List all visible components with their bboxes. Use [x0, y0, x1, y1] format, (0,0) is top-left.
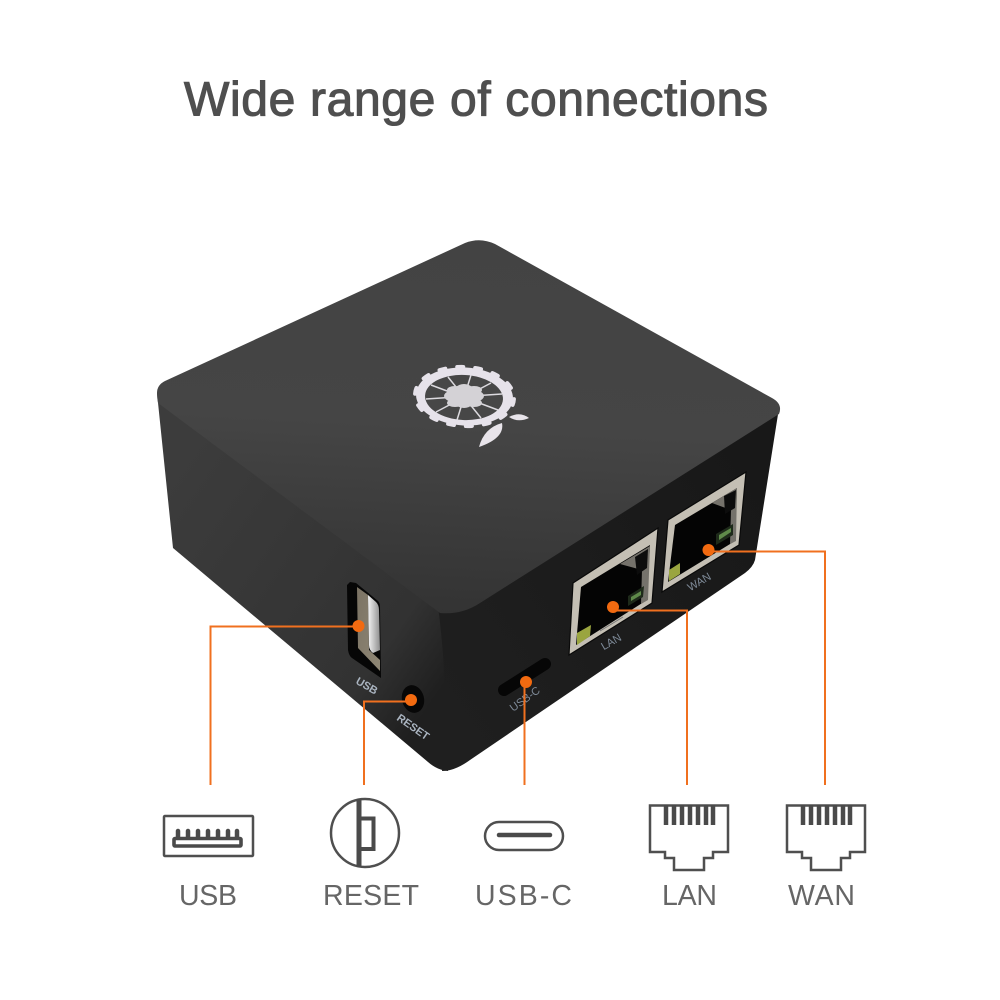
callout line: USB [210, 620, 364, 785]
label: USB: USB [179, 880, 237, 912]
icon: USB [164, 816, 253, 856]
logo [414, 364, 529, 447]
device: mini router [157, 240, 780, 771]
WAN contacts [712, 488, 737, 544]
WAN port [662, 472, 746, 594]
device top face [157, 240, 780, 613]
USB slot [347, 582, 381, 678]
logo flower [444, 384, 484, 408]
LAN print: LAN [599, 632, 624, 653]
LAN port [569, 528, 658, 655]
logo gear ring [415, 365, 514, 428]
WAN frame [662, 472, 746, 592]
WAN print: WAN [686, 571, 713, 594]
label: USB-C: USB-C [475, 880, 572, 912]
USB-C slot [504, 664, 545, 690]
callout line: LAN [607, 601, 687, 785]
reset hole [399, 683, 427, 715]
label: WAN: WAN [788, 880, 855, 912]
LAN contacts [620, 546, 650, 604]
label: RESET: RESET [323, 880, 419, 912]
WAN leds [716, 524, 733, 545]
reset button [394, 683, 431, 743]
LAN lower strip [600, 617, 623, 631]
USB-C print: USB-C [508, 685, 543, 714]
reset print: RESET [394, 712, 431, 743]
device right face [438, 408, 779, 771]
USB metal shell [357, 587, 380, 671]
WAN cavity [668, 488, 737, 582]
icon: LAN [650, 805, 728, 870]
LAN leds [628, 586, 644, 606]
LAN cavity [576, 545, 650, 645]
device left face [157, 393, 448, 771]
icon: USB-C [485, 822, 563, 850]
callout line: WAN [702, 544, 825, 785]
USB port [347, 582, 381, 697]
icon: WAN [787, 805, 865, 870]
callout line: USB-C [520, 676, 532, 785]
label: LAN: LAN [662, 880, 717, 912]
USB-C port [504, 664, 545, 714]
logo spokes [426, 375, 502, 420]
USB print: USB [353, 675, 380, 697]
USB white tongue [368, 595, 380, 653]
logo leaves [509, 414, 529, 420]
callout line: RESET [364, 694, 417, 785]
LAN frame [569, 528, 658, 655]
icon: RESET [331, 799, 399, 867]
title: Wide range of connections [184, 74, 768, 126]
